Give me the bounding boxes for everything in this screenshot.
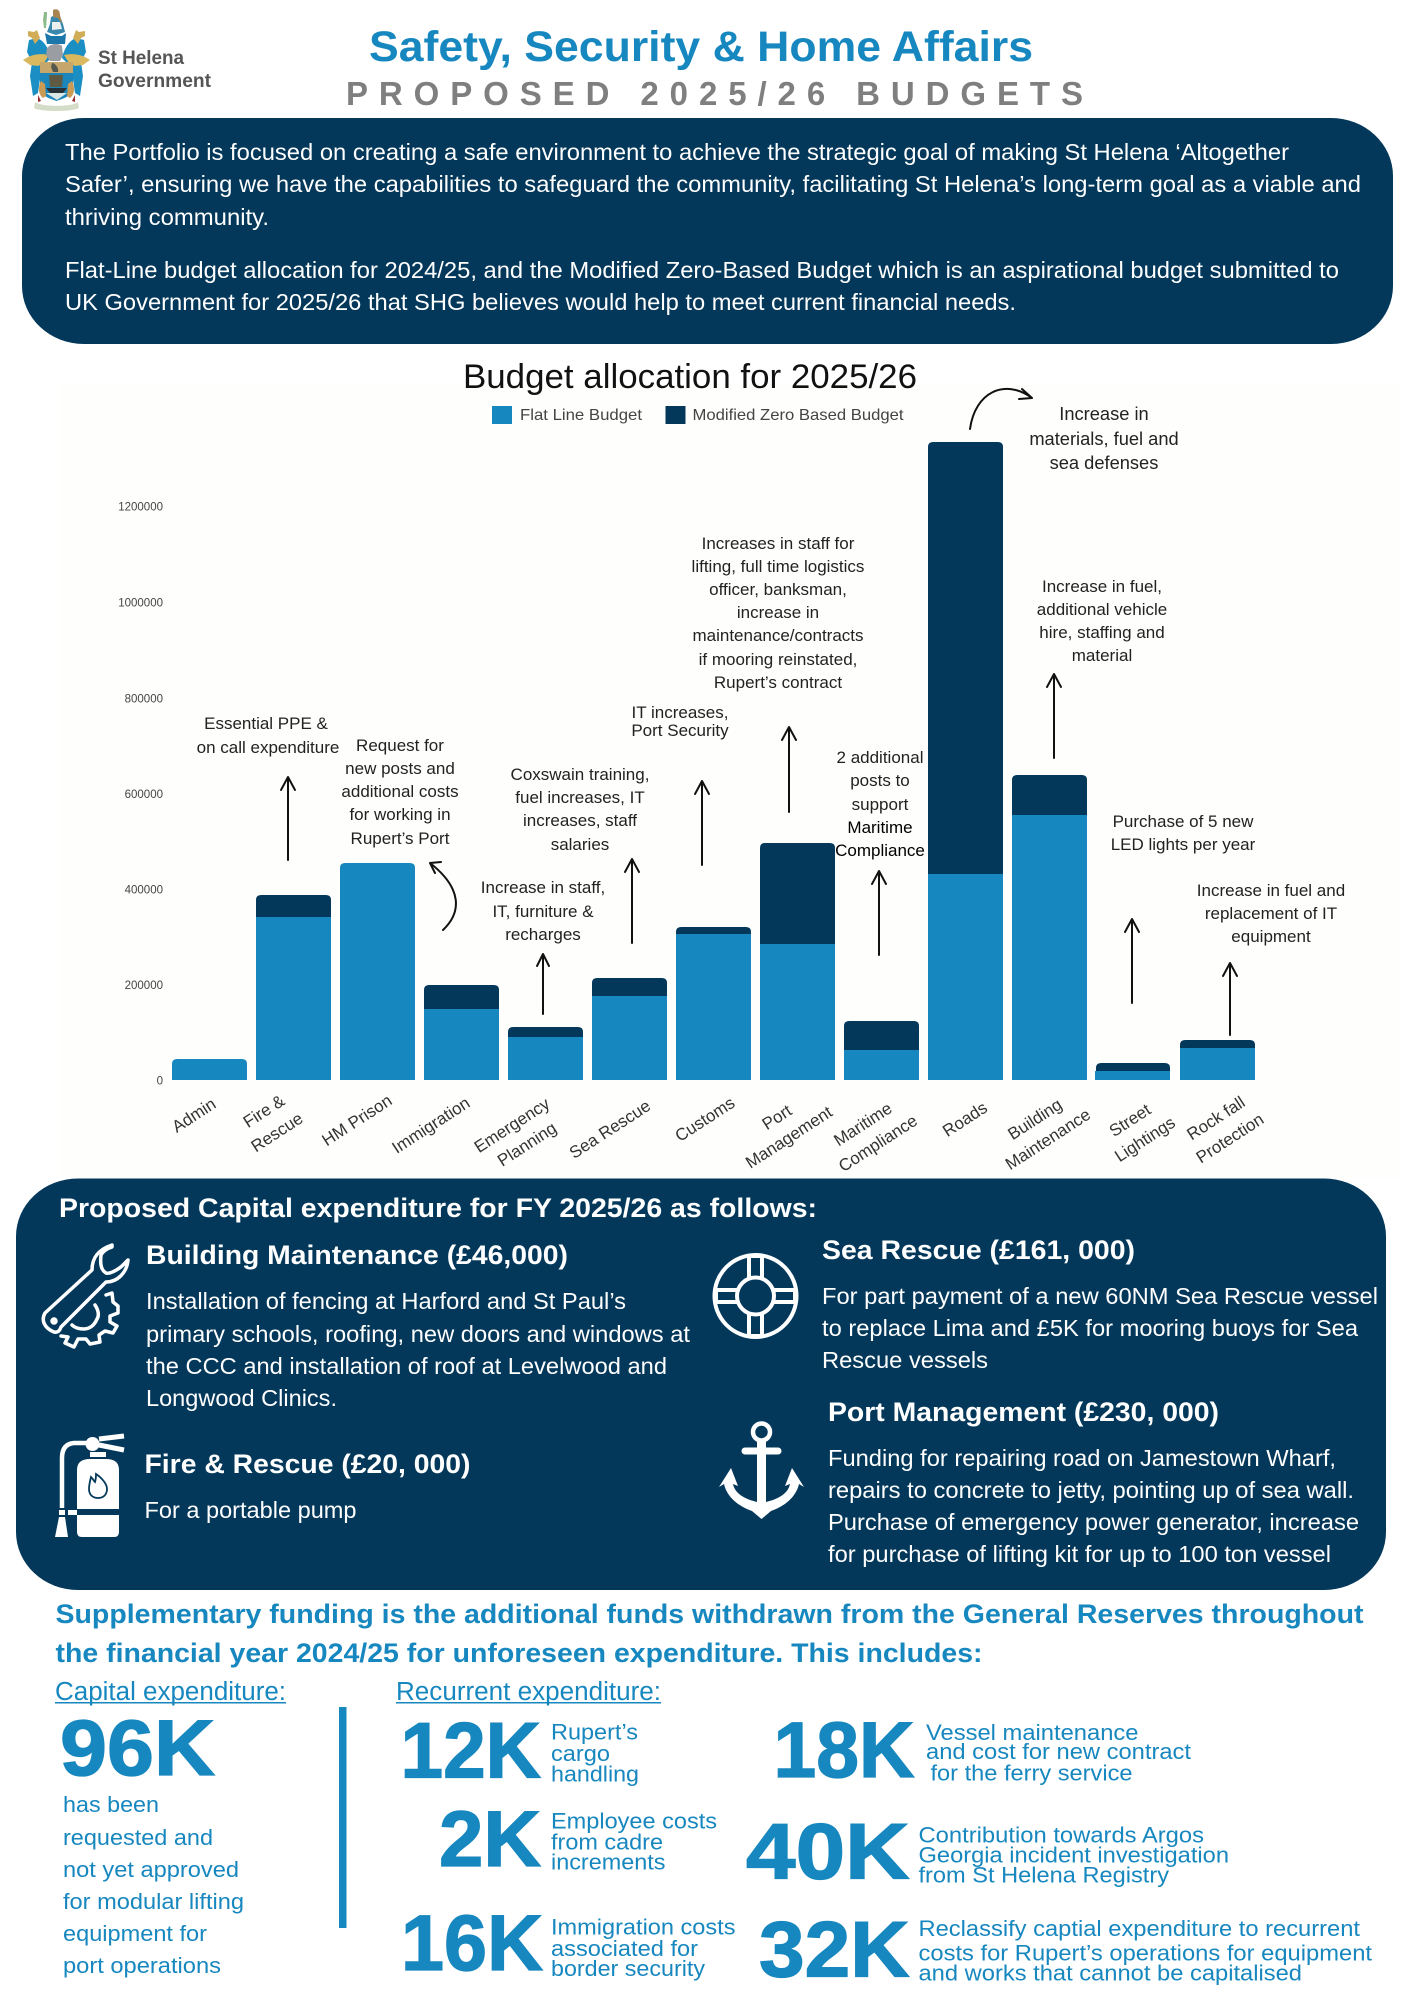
bar: Fire and Rescue <box>256 895 331 1080</box>
bar: Port Management <box>760 843 835 1080</box>
stat: 18K: and cost for new contract <box>926 1739 1192 1764</box>
category labels: Roads <box>939 1098 991 1141</box>
stat: 32K: and works that cannot be capitalised <box>918 1960 1302 1986</box>
annotation: Immigration and Emergency Planning <box>481 878 605 944</box>
stat: 32K: Reclassify captial expenditure to recurrent <box>918 1916 1361 1941</box>
intro text: portfolio focus: thriving community. <box>65 204 269 230</box>
category labels: Maintenance <box>1002 1105 1094 1174</box>
bar: Immigration <box>424 985 499 1080</box>
text: 96K description <box>63 1792 244 1978</box>
arrow: Rock fall Protection <box>1223 963 1237 1035</box>
category labels: Customs <box>672 1093 738 1146</box>
annotation: Roads: Increase in <box>1059 403 1149 424</box>
intro text: portfolio focus: The Portfolio is focused on creating a safe environment to achieve the strategic goal of making St Helena ‘Altogether <box>65 139 1289 165</box>
category labels: Management <box>742 1102 836 1172</box>
stat: 32K: 32K <box>759 1904 910 1994</box>
text: Fire and Rescue <box>144 1449 470 1523</box>
intro text: portfolio focus <box>65 139 1361 230</box>
icon: lifebuoy <box>714 1255 796 1337</box>
stat: 12K <box>400 1706 639 1794</box>
bar: Rock fall Protection <box>1180 1040 1255 1080</box>
title: Safety, Security & Home Affairs <box>369 23 1033 71</box>
annotation: Building Maintenance <box>1037 577 1167 665</box>
text: 96K description: equipment for <box>63 1921 208 1946</box>
annotation: Roads <box>1029 403 1179 473</box>
chart title: Budget allocation for 2025/26 <box>463 358 917 396</box>
annotation: Port Management: increase in <box>737 603 819 622</box>
legend <box>492 406 904 424</box>
text: Port Management: Purchase of emergency power generator, increase <box>828 1509 1359 1535</box>
text: Sea Rescue: For part payment of a new 60NM Sea Rescue vessel <box>822 1283 1378 1309</box>
annotation: Port Management: lifting, full time logistics <box>692 557 864 576</box>
stat: 12K: handling <box>551 1762 639 1786</box>
logo wordmark: Government <box>98 71 212 92</box>
annotation: HM Prison: new posts and <box>345 759 455 778</box>
category labels: Protection <box>1193 1110 1267 1167</box>
y axis labels: 1200000 <box>118 502 163 514</box>
arrow: Street Lightings <box>1125 919 1139 1003</box>
category labels: Lightings <box>1111 1113 1179 1166</box>
text: Building Maintenance: the CCC and installation of roof at Levelwood and <box>146 1353 667 1379</box>
annotation: Port Management: Increases in staff for <box>702 534 855 553</box>
y axis labels: 0 <box>157 1076 163 1088</box>
bar: Maritime Compliance <box>844 1021 919 1080</box>
category labels: Maritime <box>831 1099 896 1150</box>
stat: 2K: from cadre <box>551 1830 663 1854</box>
text: 96K description: not yet approved <box>63 1857 239 1882</box>
annotation: Sea Rescue: Coxswain training, <box>511 765 649 784</box>
arrow: Fire and Rescue <box>281 777 295 860</box>
annotation: HM Prison: Request for <box>356 736 444 755</box>
annotation: Immigration and Emergency Planning: Increase in staff, <box>481 878 605 897</box>
bar: Building Maintenance <box>1012 775 1087 1080</box>
stat: 40K: Contribution towards Argos <box>918 1822 1204 1848</box>
stat: 40K: 40K <box>746 1806 910 1896</box>
y axis labels: 400000 <box>125 884 163 896</box>
annotation: Building Maintenance: hire, staffing and <box>1039 623 1165 642</box>
y axis labels: 800000 <box>125 694 163 706</box>
arrow: Roads curved <box>970 389 1032 429</box>
text: Building Maintenance: Building Maintenance (£46,000) <box>146 1240 568 1270</box>
annotation: Building Maintenance: additional vehicle <box>1037 600 1167 619</box>
text: Fire and Rescue: Fire & Rescue (£20, 000) <box>144 1449 470 1479</box>
logo wordmark <box>98 48 212 92</box>
logo wordmark: St Helena <box>98 48 184 69</box>
stat: 18K: Vessel maintenance <box>926 1720 1138 1745</box>
text: 96K description: port operations <box>63 1953 221 1978</box>
stat: 16K: 16K <box>401 1898 543 1987</box>
intro text: budget explanation: Flat-Line budget allocation for 2024/25, and the Modified Zero-Based Budget which is an aspirational budget submitted to <box>65 257 1339 283</box>
annotation: Rock fall Protection: Increase in fuel and <box>1197 881 1345 900</box>
category labels: Admin <box>169 1094 219 1136</box>
annotation: HM Prison: additional costs <box>341 782 459 801</box>
arrow: Building Maintenance <box>1047 674 1061 758</box>
text: 96K description: for modular lifting <box>63 1889 244 1914</box>
stat: 18K: for the ferry service <box>930 1760 1132 1786</box>
category labels: Sea Rescue <box>566 1096 654 1163</box>
heading: supplementary funding <box>56 1599 1364 1668</box>
annotation: Maritime Compliance: Compliance <box>835 841 925 860</box>
logo: St Helena Government <box>23 9 212 111</box>
y axis labels: 200000 <box>125 980 163 992</box>
annotation: Maritime Compliance <box>835 748 925 860</box>
bar: Customs <box>676 927 751 1080</box>
stat: 18K: 18K <box>774 1705 914 1794</box>
category labels <box>169 1091 1267 1176</box>
section: capital expenditure <box>55 1678 286 1978</box>
y axis labels: 1000000 <box>118 598 163 610</box>
annotation: Port Management: officer, banksman, <box>709 580 847 599</box>
annotation: Street Lightings <box>1111 812 1256 854</box>
arrow: Port Management <box>782 727 796 812</box>
stat: 12K: cargo <box>551 1741 610 1766</box>
category labels: Port <box>759 1101 795 1134</box>
panel: proposed capital expenditure <box>16 1178 1386 1590</box>
text: Fire and Rescue: For a portable pump <box>144 1497 356 1523</box>
intro text: budget explanation <box>65 257 1339 315</box>
intro text: portfolio focus: Safer’, ensuring we have the capabilities to safeguard the community, facilitating St Helena’s long-term goal as a viable and <box>65 171 1361 197</box>
annotation: Sea Rescue: fuel increases, IT <box>515 788 645 807</box>
annotation: HM Prison: Rupert’s Port <box>351 829 450 848</box>
annotation: Fire and Rescue: on call expenditure <box>197 738 339 757</box>
annotation: Immigration and Emergency Planning: IT, furniture & <box>492 902 594 921</box>
arrow: Emergency Planning <box>537 954 549 1014</box>
annotation: Port Management: maintenance/contracts <box>692 626 864 645</box>
legend: Flat Line Budget <box>520 407 643 424</box>
category labels: Emergency <box>471 1094 554 1157</box>
category labels: Fire & <box>240 1091 289 1132</box>
annotation: Customs <box>631 703 729 740</box>
subheading: capital expenditure: Capital expenditure: <box>55 1678 286 1706</box>
text: Building Maintenance: primary schools, roofing, new doors and windows at <box>146 1321 691 1347</box>
bar: HM Prison <box>340 863 415 1080</box>
category labels: Rescue <box>248 1109 306 1156</box>
stat: 2K: Employee costs <box>551 1808 717 1834</box>
text: Port Management: Port Management (£230, 000) <box>828 1397 1219 1427</box>
text: Building Maintenance <box>146 1240 691 1411</box>
category labels: Planning <box>494 1118 560 1170</box>
annotation: HM Prison: for working in <box>349 805 451 824</box>
panel: budget chart <box>60 358 1400 1178</box>
stat: 12K: 12K <box>400 1706 541 1794</box>
arrow: Sea Rescue <box>625 859 639 943</box>
annotation: Roads: materials, fuel and <box>1029 428 1179 449</box>
stat: 2K: increments <box>551 1850 666 1874</box>
stat: 18K <box>774 1705 1192 1794</box>
annotation: Immigration and Emergency Planning: recharges <box>505 925 581 944</box>
text: Port Management <box>828 1397 1359 1567</box>
text: Sea Rescue <box>822 1235 1378 1373</box>
text: Port Management: for purchase of lifting kit for up to 100 ton vessel <box>828 1541 1331 1567</box>
annotation: Maritime Compliance: posts to <box>850 771 910 790</box>
bar: Street Lightings <box>1095 1063 1170 1080</box>
icon: fire extinguisher <box>55 1436 124 1537</box>
annotation: Roads: sea defenses <box>1050 452 1158 473</box>
y axis labels <box>118 502 163 1088</box>
annotation: Sea Rescue <box>511 765 649 854</box>
category labels: Rock fall <box>1183 1093 1249 1144</box>
annotation: Building Maintenance: Increase in fuel, <box>1042 577 1162 596</box>
bar: Roads <box>928 442 1003 1080</box>
annotation: Fire and Rescue <box>197 714 339 757</box>
text: Sea Rescue: Sea Rescue (£161, 000) <box>822 1235 1135 1265</box>
annotation: Building Maintenance: material <box>1072 646 1132 665</box>
annotation: Port Management: if mooring reinstated, <box>699 650 857 669</box>
stat: 16K: Immigration costs <box>551 1914 736 1940</box>
category labels: HM Prison <box>319 1091 395 1150</box>
icon: wrench and gear <box>43 1245 128 1347</box>
arrow: HM Prison curved <box>430 862 456 930</box>
bar: Sea Rescue <box>592 978 667 1080</box>
annotation: Maritime Compliance: support <box>852 795 909 814</box>
stat: 32K <box>759 1904 1373 1994</box>
category labels: Street <box>1106 1100 1154 1141</box>
stat: 40K: from St Helena Registry <box>918 1862 1170 1888</box>
annotation: Rock fall Protection: equipment <box>1231 927 1311 946</box>
heading: supplementary funding: the financial year 2024/25 for unforeseen expenditure. This includes: <box>56 1638 982 1668</box>
legend: Modified Zero Based Budget <box>692 407 904 424</box>
bars <box>172 442 1255 1080</box>
intro text: budget explanation: UK Government for 2025/26 that SHG believes would help to meet current financial needs. <box>65 289 1016 315</box>
annotation: Rock fall Protection <box>1197 881 1345 946</box>
stat: 16K <box>401 1898 736 1987</box>
text: Building Maintenance: Longwood Clinics. <box>146 1385 337 1411</box>
annotation: Maritime Compliance: 2 additional <box>837 748 923 767</box>
text: Sea Rescue: to replace Lima and £5K for mooring buoys for Sea <box>822 1315 1358 1341</box>
text: Port Management: repairs to concrete to jetty, pointing up of sea wall. <box>828 1477 1354 1503</box>
annotation: Street Lightings: Purchase of 5 new <box>1113 812 1254 831</box>
arrow: Maritime Compliance <box>872 871 886 955</box>
annotation: HM Prison <box>341 736 459 848</box>
stat: 2K <box>439 1794 717 1883</box>
annotation: Customs: IT increases, <box>631 703 729 722</box>
text: Building Maintenance: Installation of fencing at Harford and St Paul’s <box>146 1288 626 1314</box>
icon: anchor <box>719 1424 804 1519</box>
section: recurrent expenditure <box>396 1678 1373 1994</box>
annotation: Sea Rescue: increases, staff <box>523 811 637 830</box>
arrow: Customs <box>695 781 709 865</box>
annotation: Customs: Port Security <box>631 721 729 740</box>
stat: 96K: 96K <box>60 1703 215 1792</box>
subheading: recurrent expenditure: Recurrent expenditure: <box>396 1678 661 1706</box>
subtitle: PROPOSED 2025/26 BUDGETS <box>346 75 1083 112</box>
heading: supplementary funding: Supplementary funding is the additional funds withdrawn from the General Reserves throughout <box>56 1599 1364 1629</box>
panel: introduction <box>22 118 1393 344</box>
annotation: Maritime Compliance: Maritime <box>847 818 913 837</box>
category labels: Immigration <box>389 1093 473 1158</box>
annotation: Fire and Rescue: Essential PPE & <box>204 714 329 733</box>
stat: 40K: Georgia incident investigation <box>918 1842 1229 1868</box>
stat: 40K <box>746 1806 1229 1896</box>
annotation: Port Management: Rupert’s contract <box>714 673 842 692</box>
category labels: Compliance <box>835 1111 921 1176</box>
annotation: Sea Rescue: salaries <box>551 835 609 854</box>
text: Sea Rescue: Rescue vessels <box>822 1347 988 1373</box>
stat: 2K: 2K <box>439 1794 541 1883</box>
text: 96K description: has been <box>63 1792 159 1817</box>
stat: 16K: border security <box>551 1956 706 1981</box>
stat: 16K: associated for <box>551 1936 699 1961</box>
annotation: Street Lightings: LED lights per year <box>1111 835 1256 854</box>
stat: 32K: costs for Rupert’s operations for equipment <box>918 1940 1373 1966</box>
text: Port Management: Funding for repairing road on Jamestown Wharf, <box>828 1445 1336 1471</box>
annotation: Rock fall Protection: replacement of IT <box>1205 904 1337 923</box>
y axis labels: 600000 <box>125 789 163 801</box>
divider bar <box>339 1707 346 1928</box>
panel heading: Proposed Capital expenditure for FY 2025/26 as follows: <box>59 1193 817 1223</box>
text: 96K description: requested and <box>63 1825 213 1850</box>
bar: Admin <box>172 1059 247 1080</box>
category labels: Building <box>1004 1095 1066 1144</box>
stat: 12K: Rupert’s <box>551 1720 638 1744</box>
bar: Emergency Planning <box>508 1027 583 1080</box>
icon: coat of arms crest <box>23 9 90 111</box>
annotation: Port Management <box>692 534 864 692</box>
